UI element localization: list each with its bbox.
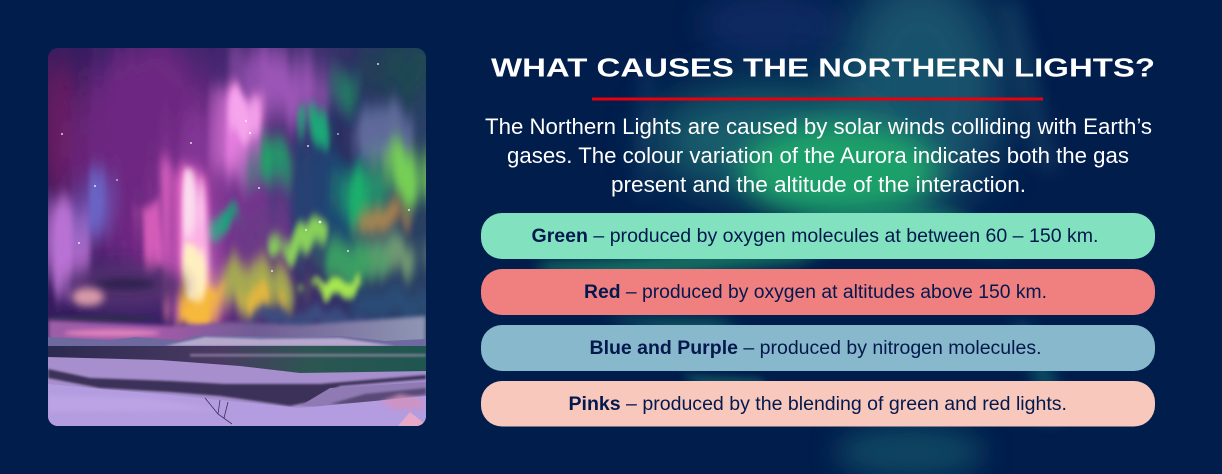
pill: pinks: Pinks – produced by the blending of green and red lights. [568, 394, 1067, 415]
intro text: The Northern Lights are caused by solar winds colliding with Earth’s [485, 114, 1152, 139]
title: WHAT CAUSES THE NORTHERN LIGHTS? [491, 52, 1155, 82]
snow mound right [300, 382, 426, 408]
mountains [48, 335, 426, 346]
red divider [592, 98, 1043, 100]
pill: blue and purple [481, 325, 1155, 371]
intro text: gases. The colour variation of the Aurora indicates both the gas [507, 143, 1129, 168]
foreground drifts [48, 384, 426, 426]
clouds [42, 264, 185, 322]
pill: blue and purple: Blue and Purple – produced by nitrogen molecules. [590, 338, 1042, 359]
horizon glow [48, 316, 426, 345]
shrub line [48, 369, 426, 406]
intro text: present and the altitude of the interaction. [611, 172, 1026, 197]
night sky with aurora curtains [48, 48, 426, 339]
intro text [485, 114, 1152, 197]
pill: green [481, 213, 1155, 259]
stars [61, 63, 410, 272]
pill: red: Red – produced by oxygen at altitudes above 150 km. [584, 282, 1047, 303]
bare branches [205, 398, 232, 424]
lake [48, 346, 426, 374]
snow field [48, 357, 426, 426]
pill: pinks [481, 381, 1155, 426]
aurora photograph [48, 48, 426, 426]
pill: red [481, 269, 1155, 315]
pill: green: Green – produced by oxygen molecules at between 60 – 150 km. [532, 226, 1098, 247]
